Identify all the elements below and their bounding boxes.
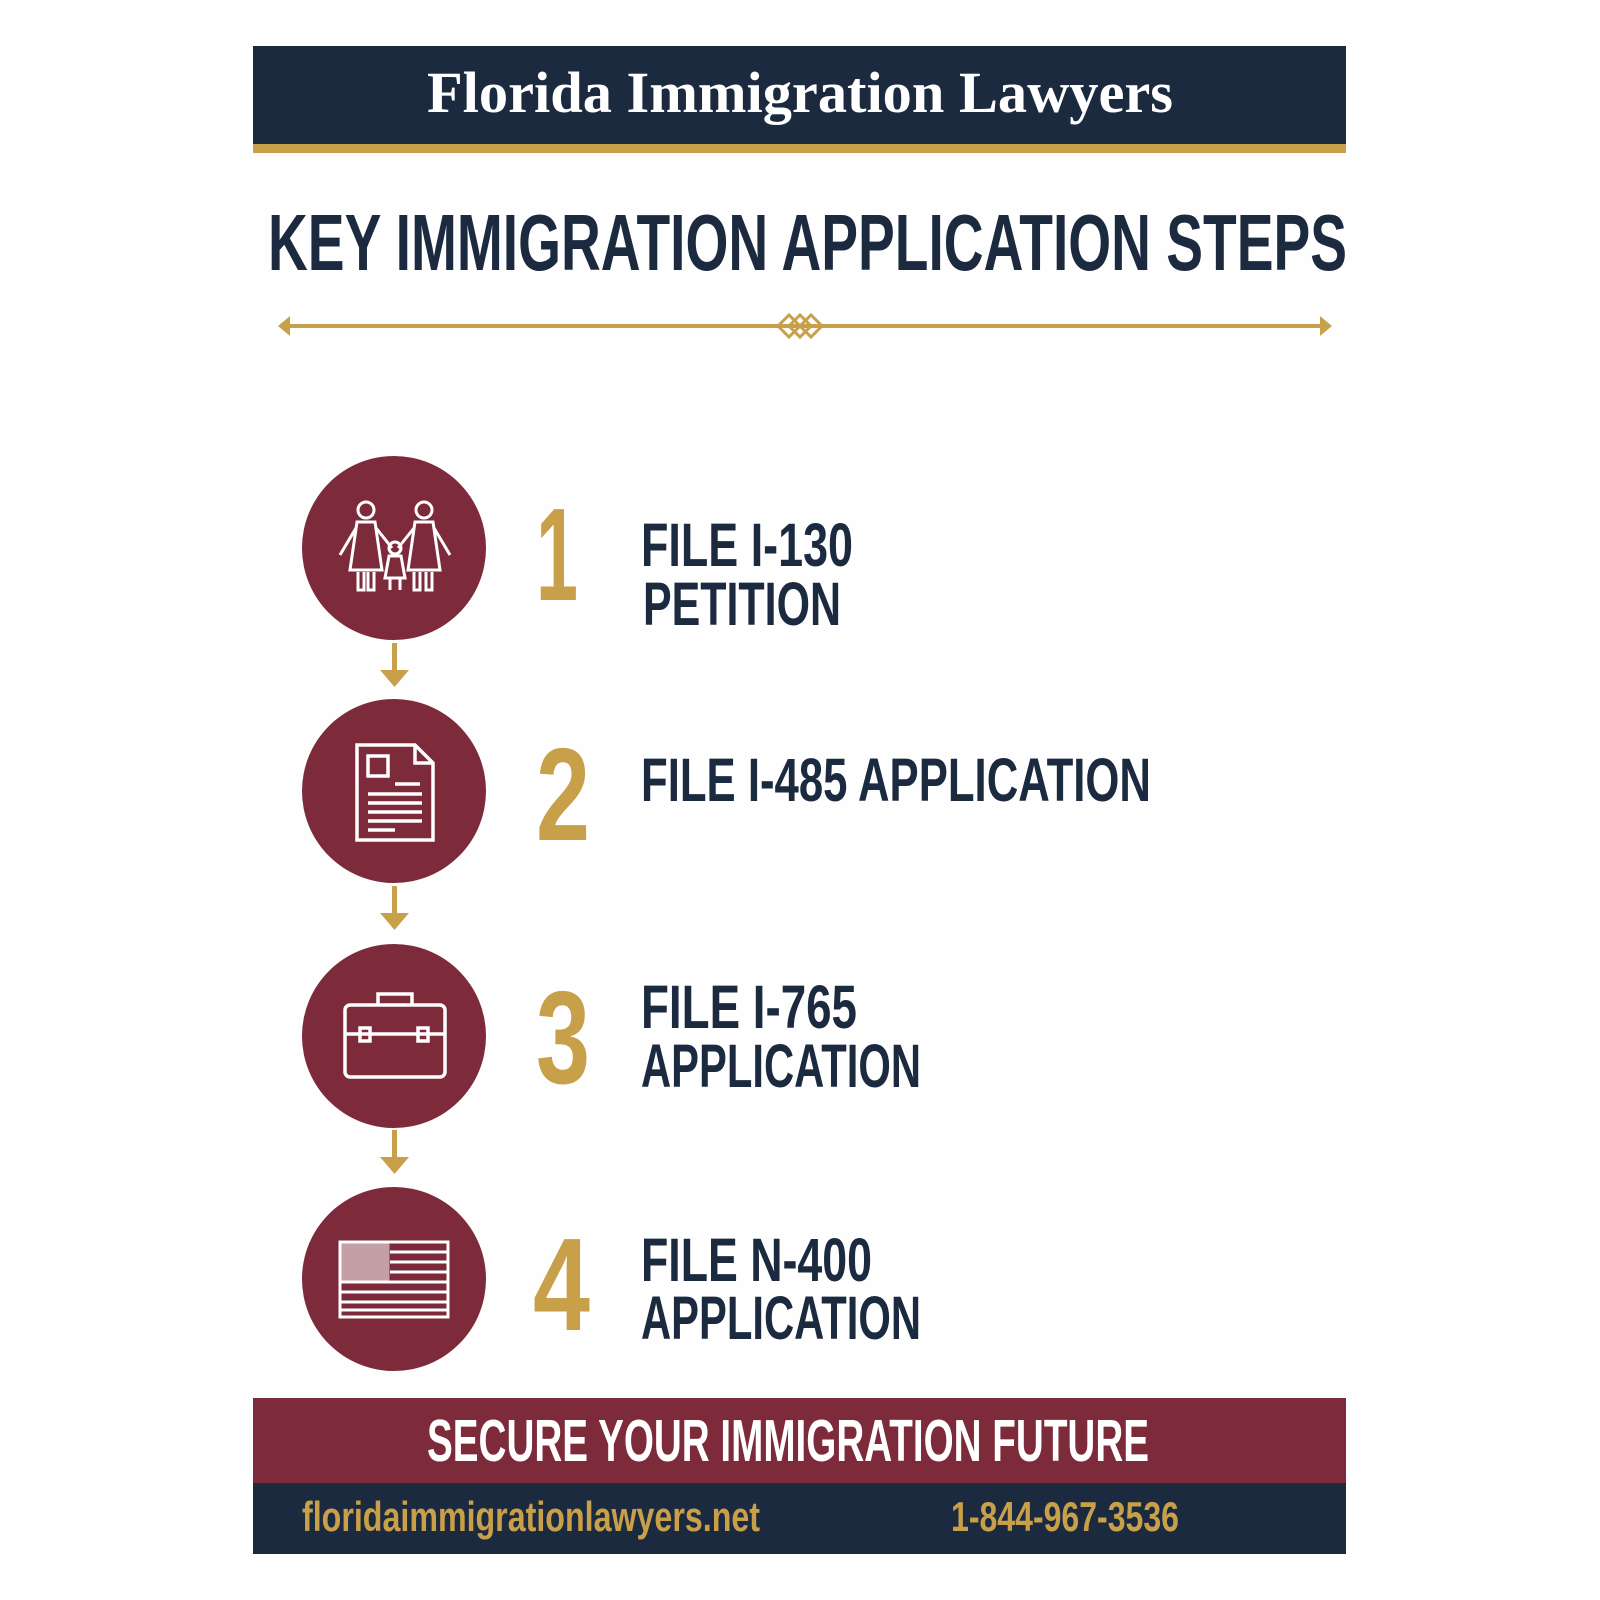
icon: flag <box>302 1187 486 1371</box>
label 1: FILE I-130 <box>641 511 853 579</box>
step 4 <box>302 1187 921 1371</box>
footer banner <box>253 1398 1346 1554</box>
step 3 <box>302 944 921 1128</box>
header title: Florida Immigration Lawyers <box>427 60 1173 125</box>
number 3: 3 <box>536 964 590 1111</box>
icon: briefcase <box>302 944 486 1128</box>
label 3: APPLICATION <box>641 1032 921 1100</box>
footer slogan: SECURE YOUR IMMIGRATION FUTURE <box>427 1408 1149 1474</box>
label 2: FILE I-485 APPLICATION <box>641 746 1151 814</box>
divider ornament <box>278 315 1332 337</box>
number 2: 2 <box>536 721 590 868</box>
label 4: FILE N-400 <box>641 1226 872 1294</box>
footer phone: 1-844-967-3536 <box>951 1493 1179 1540</box>
footer url: floridaimmigrationlawyers.net <box>302 1493 760 1540</box>
number 4: 4 <box>533 1211 590 1358</box>
arrow 3 <box>380 1130 409 1174</box>
header banner <box>253 46 1346 153</box>
label 4: APPLICATION <box>641 1284 921 1352</box>
icon: document <box>302 699 486 883</box>
label 3: FILE I-765 <box>641 973 857 1041</box>
arrow 1 <box>380 643 409 687</box>
number 1: 1 <box>536 481 578 628</box>
label 1: PETITION <box>643 570 841 638</box>
icon: family <box>302 456 486 640</box>
step 1 <box>302 456 853 640</box>
step 2 <box>302 699 1151 883</box>
arrow 2 <box>380 886 409 930</box>
